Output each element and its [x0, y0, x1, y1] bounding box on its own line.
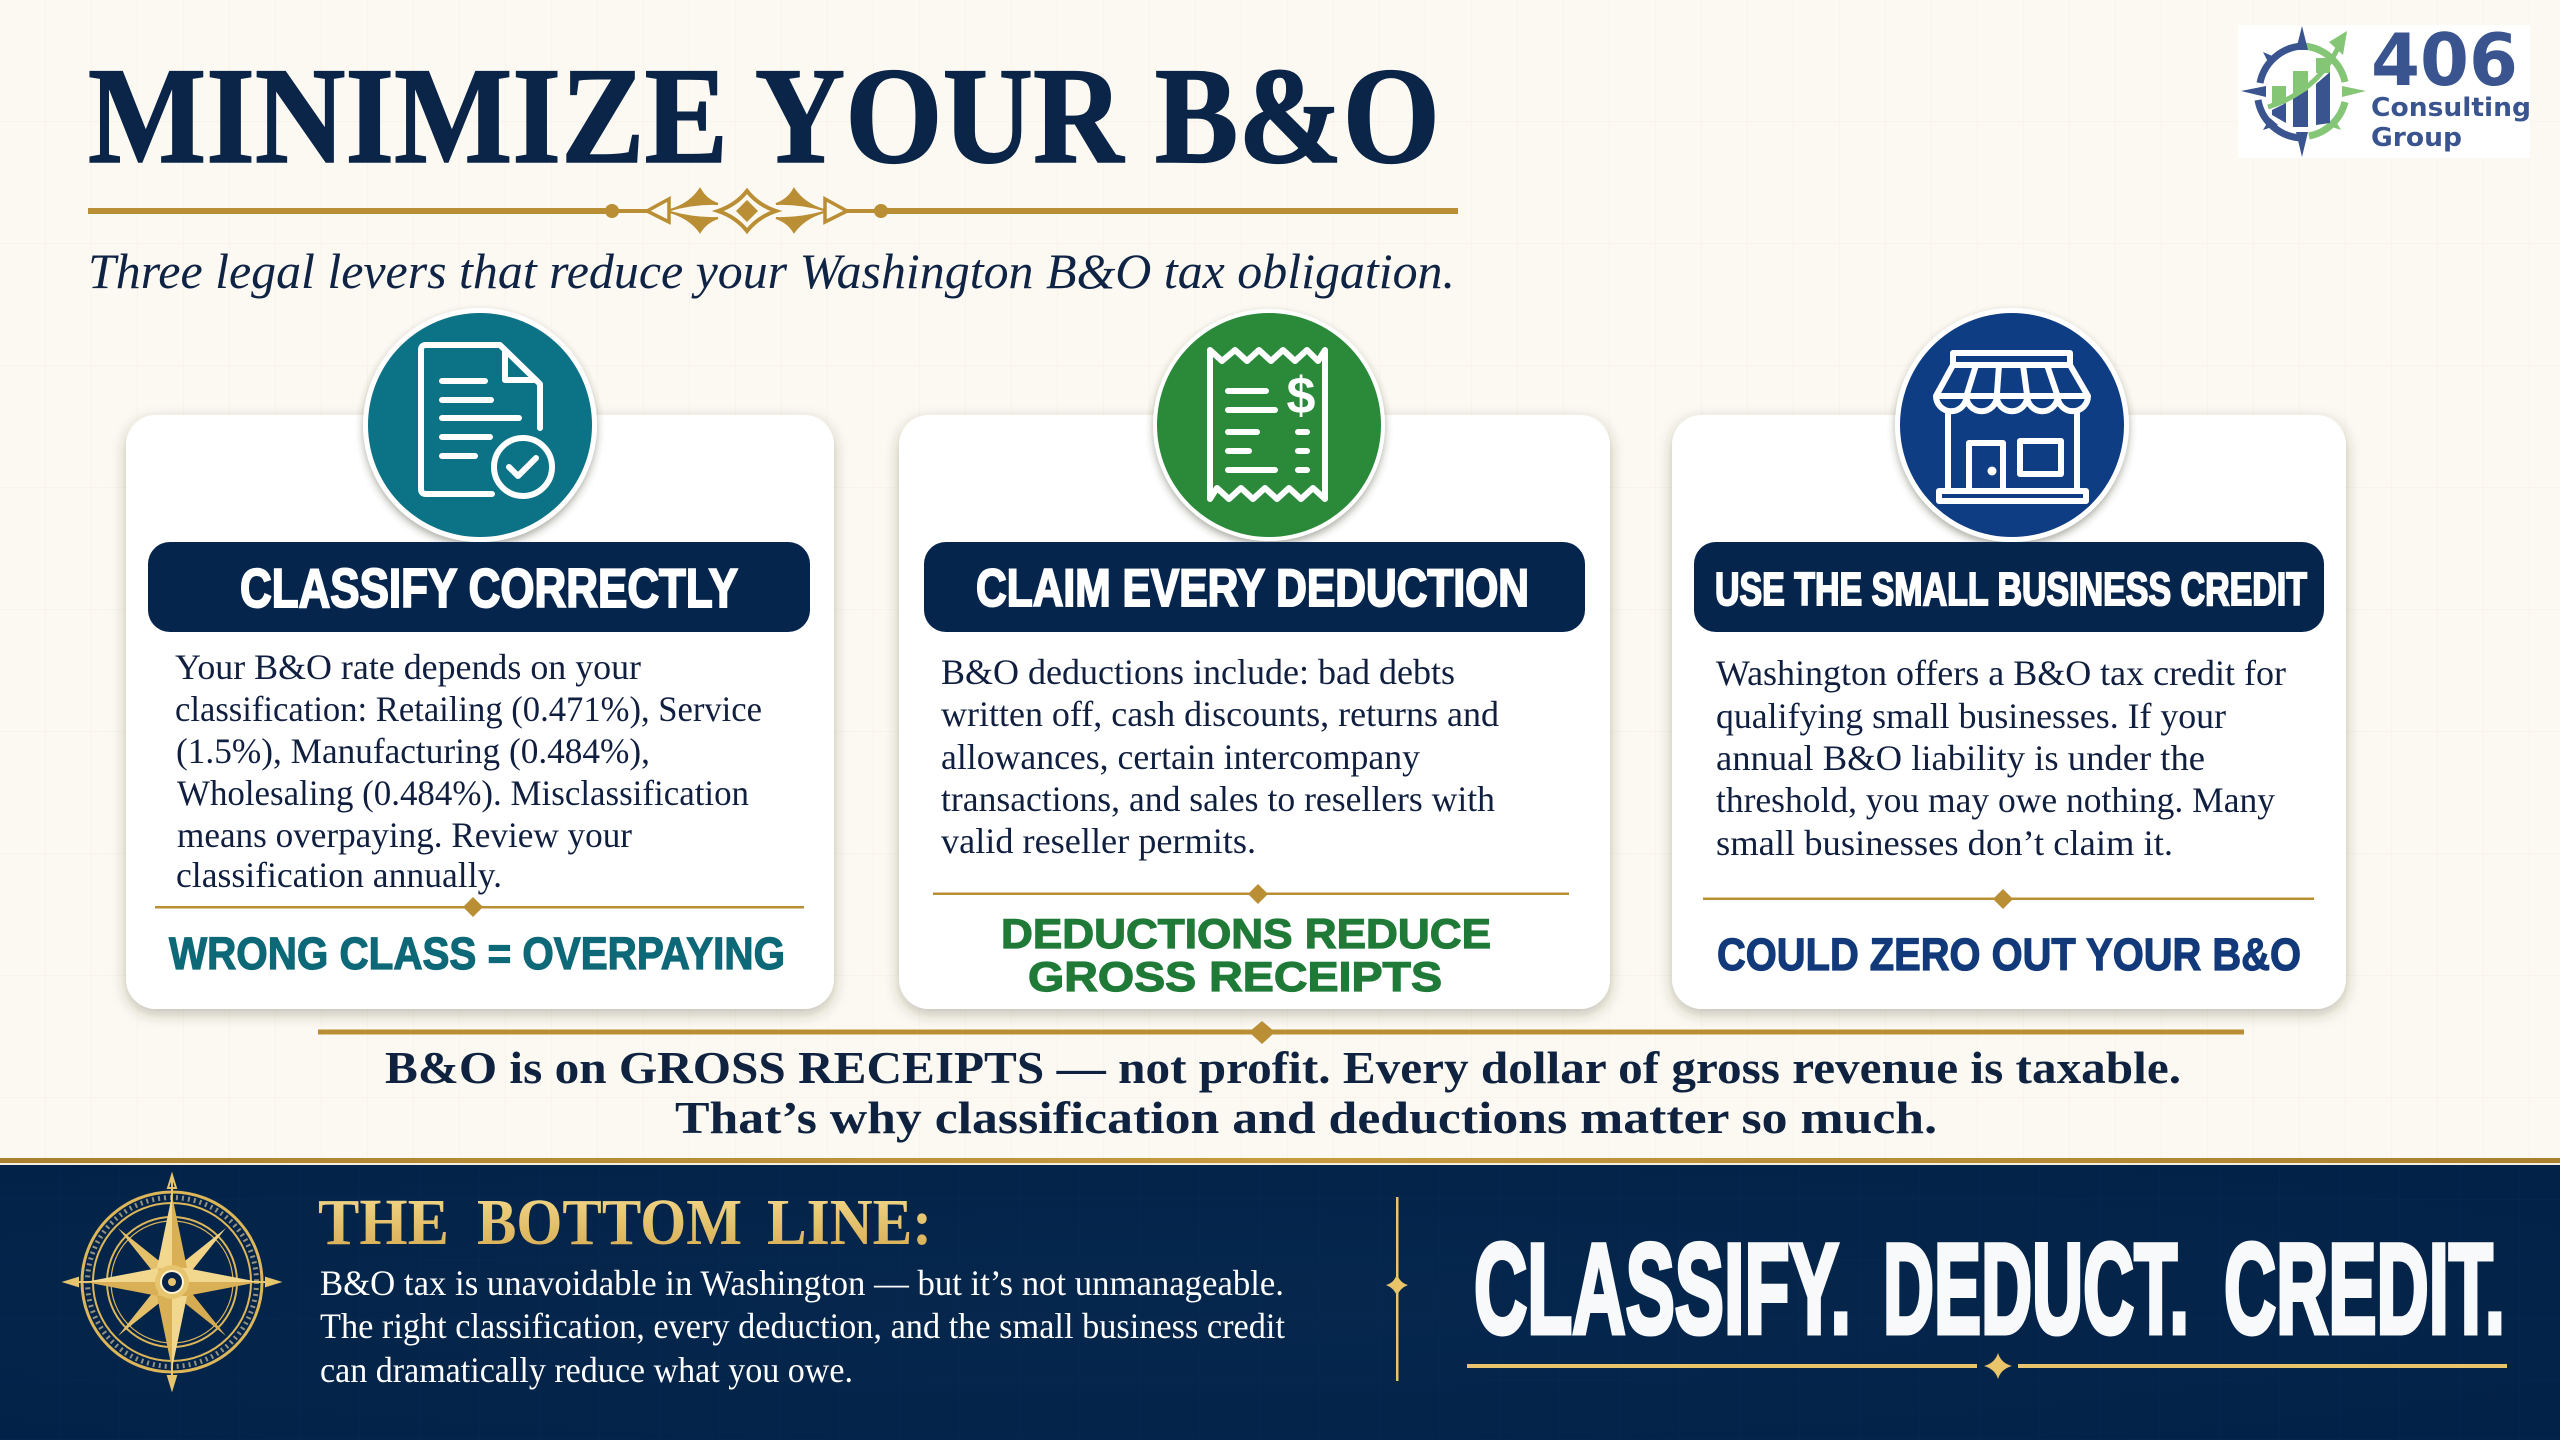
- body text: [175, 647, 762, 895]
- heading: the bottom line: THE: [318, 1186, 449, 1259]
- body text: means overpaying. Review your: [177, 815, 632, 855]
- body text: B&O deductions include: bad debts: [941, 652, 1455, 692]
- icon: storefront: [1895, 308, 2129, 542]
- logo compass mark: [2241, 26, 2366, 157]
- panel: classify correctly: [126, 308, 834, 1009]
- divider: [933, 884, 1569, 904]
- logo wordmark: [2371, 18, 2531, 153]
- callout: gross receipts: [385, 1043, 2181, 1143]
- callout: gross receipts: B&O is on GROSS RECEIPTS — not profit. Every dollar of gross revenue is taxable.: [385, 1043, 2181, 1093]
- body text: threshold, you may owe nothing. Many: [1716, 780, 2275, 820]
- body text: written off, cash discounts, returns and: [941, 694, 1499, 734]
- body text: Washington offers a B&O tax credit for: [1716, 653, 2286, 693]
- body text: valid reseller permits.: [941, 821, 1256, 861]
- takeaway: COULD ZERO OUT YOUR B&O: [1717, 929, 2301, 980]
- takeaway: WRONG CLASS = OVERPAYING: [169, 928, 785, 979]
- logo: 406 Consulting Group: [2238, 18, 2531, 158]
- bottom line text: The right classification, every deduction, and the small business credit: [320, 1306, 1285, 1346]
- body text: annual B&O liability is under the: [1716, 738, 2205, 778]
- takeaway: [1001, 910, 1491, 1000]
- subtitle: Three legal levers that reduce your Washington B&O tax obligation.: [88, 243, 1455, 299]
- body text: allowances, certain intercompany: [941, 737, 1420, 777]
- body text: [941, 652, 1499, 861]
- bottom line text: [320, 1263, 1285, 1390]
- ornamental divider under title: [88, 189, 1458, 232]
- body text: [1716, 653, 2286, 863]
- body text: small businesses don’t claim it.: [1716, 823, 2173, 863]
- divider: [1703, 889, 2314, 909]
- divider: [155, 897, 804, 917]
- body text: transactions, and sales to resellers with: [941, 779, 1495, 819]
- body text: Wholesaling (0.484%). Misclassification: [177, 773, 749, 813]
- panel: claim every deduction: [899, 309, 1610, 1009]
- heading bar: [1694, 542, 2324, 632]
- body text: classification annually.: [176, 855, 502, 895]
- takeaway: GROSS RECEIPTS: [1028, 953, 1442, 1000]
- body text: (1.5%), Manufacturing (0.484%),: [176, 731, 650, 771]
- logo wordmark: 406: [2371, 18, 2518, 102]
- heading: the bottom line: LINE:: [767, 1186, 932, 1259]
- bottom line text: B&O tax is unavoidable in Washington — but it’s not unmanageable.: [320, 1263, 1284, 1303]
- slogan: classify deduct credit: DEDUCT.: [1883, 1218, 2189, 1361]
- heading bar: CLAIM EVERY DEDUCTION: [976, 559, 1529, 618]
- callout: gross receipts: That’s why classification and deductions matter so much.: [675, 1093, 1937, 1143]
- gold divider above callout: [318, 1021, 2244, 1044]
- body text: classification: Retailing (0.471%), Service: [175, 689, 762, 729]
- icon: compass rose: [65, 1175, 279, 1389]
- heading bar: [924, 542, 1585, 632]
- body text: Your B&O rate depends on your: [175, 647, 641, 687]
- bottom line text: can dramatically reduce what you owe.: [320, 1350, 853, 1390]
- heading: the bottom line: BOTTOM: [477, 1186, 742, 1259]
- icon: receipt with dollar sign: $: [1287, 367, 1316, 425]
- heading bar: CLASSIFY CORRECTLY: [240, 557, 738, 619]
- heading: the bottom line: [318, 1186, 932, 1259]
- panel: use the small business credit: [1672, 308, 2346, 1009]
- logo wordmark: Group: [2371, 123, 2462, 153]
- title: MINIMIZE YOUR B&O: [88, 39, 1440, 192]
- slogan: classify deduct credit: [1474, 1218, 2505, 1361]
- slogan: classify deduct credit: CLASSIFY.: [1474, 1218, 1851, 1361]
- panel: bottom line band: [0, 1158, 2560, 1440]
- heading bar: [148, 542, 810, 632]
- icon: document with check mark: [363, 308, 597, 542]
- icon: receipt with dollar sign: [1153, 309, 1385, 541]
- logo wordmark: Consulting: [2371, 93, 2531, 123]
- heading bar: USE THE SMALL BUSINESS CREDIT: [1715, 563, 2307, 615]
- takeaway: DEDUCTIONS REDUCE: [1001, 910, 1491, 957]
- slogan underline: [1467, 1353, 2507, 1379]
- body text: qualifying small businesses. If your: [1716, 696, 2226, 736]
- vertical gold divider: [1386, 1197, 1408, 1381]
